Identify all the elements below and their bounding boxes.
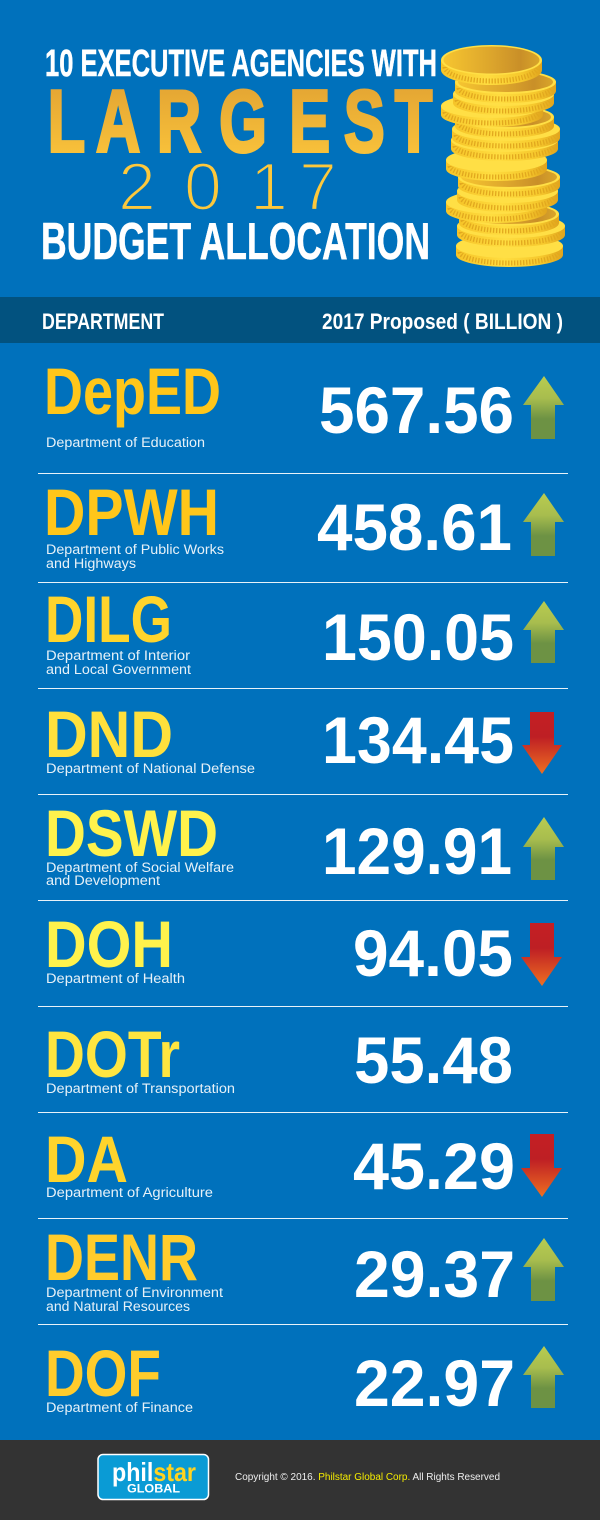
row: DPWH	[44, 475, 564, 571]
full name: Department of Health	[46, 971, 185, 986]
value: 29.37	[354, 1237, 515, 1311]
value: 22.97	[354, 1346, 515, 1420]
logo: philstar global	[98, 1454, 208, 1500]
icon: down arrow	[522, 712, 562, 774]
acronym: DOH	[45, 907, 173, 981]
full name: Department of Public Works	[46, 542, 224, 557]
title line: largest: LARGEST	[48, 73, 432, 171]
logo: philstar global: GLOBAL	[127, 1482, 180, 1496]
full name line 2: and Highways	[46, 556, 136, 571]
acronym: DepED	[44, 354, 221, 428]
acronym: DPWH	[44, 475, 219, 549]
row: DILG	[45, 582, 564, 677]
row: DSWD	[45, 796, 564, 888]
full name line 2: and Local Government	[46, 662, 191, 677]
copyright: Copyright © 2016. Philstar Global Corp. All Rights Reserved	[235, 1472, 500, 1483]
acronym: DOF	[45, 1336, 161, 1410]
icon: up arrow	[523, 1346, 564, 1408]
row: DA	[45, 1122, 562, 1203]
icon: up arrow	[523, 493, 564, 556]
full name: Department of Interior	[46, 648, 191, 663]
row: DND	[45, 697, 562, 777]
acronym: DILG	[45, 582, 172, 656]
row: DepED	[44, 354, 564, 450]
title line: 2017: 2017	[118, 149, 337, 225]
row: DOH	[45, 907, 562, 990]
value: 458.61	[317, 490, 512, 564]
row: DOF	[45, 1336, 564, 1420]
acronym: DOTr	[45, 1017, 180, 1091]
row: DENR	[45, 1220, 564, 1314]
full name line 2: and Natural Resources	[46, 1299, 190, 1314]
icon: up arrow	[523, 376, 564, 439]
icon: up arrow	[523, 601, 564, 663]
acronym: DENR	[45, 1220, 198, 1294]
logo: philstar global: philstar	[112, 1457, 196, 1487]
full name: Department of Transportation	[46, 1081, 235, 1096]
full name line 2: and Development	[46, 873, 160, 888]
full name: Department of National Defense	[46, 761, 255, 776]
value: 94.05	[353, 916, 513, 990]
title	[41, 43, 437, 271]
acronym: DND	[45, 697, 173, 771]
icon: down arrow	[521, 923, 562, 986]
row: DOTr	[45, 1017, 513, 1097]
table header band	[0, 297, 600, 343]
value: 150.05	[322, 600, 514, 674]
acronym: DA	[45, 1122, 128, 1196]
full name: Department of Agriculture	[46, 1185, 213, 1200]
footer	[0, 1440, 600, 1520]
icon: down arrow	[521, 1134, 562, 1197]
value: 45.29	[353, 1129, 515, 1203]
header: 2017 proposed billion: 2017 Proposed ( BILLION )	[322, 309, 563, 334]
full name: Department of Social Welfare	[46, 860, 234, 875]
header: department: DEPARTMENT	[42, 309, 164, 334]
value: 55.48	[354, 1023, 513, 1097]
full name: Department of Education	[46, 435, 205, 450]
value: 567.56	[319, 373, 514, 447]
value: 134.45	[322, 703, 514, 777]
full name: Department of Finance	[46, 1400, 193, 1415]
icon: up arrow	[523, 817, 564, 880]
icon: stack of gold coins	[441, 45, 565, 267]
value: 129.91	[322, 814, 512, 888]
title line: budget allocation: BUDGET ALLOCATION	[41, 213, 430, 271]
icon: up arrow	[523, 1238, 564, 1301]
acronym: DSWD	[45, 796, 218, 870]
full name: Department of Environment	[46, 1285, 223, 1300]
